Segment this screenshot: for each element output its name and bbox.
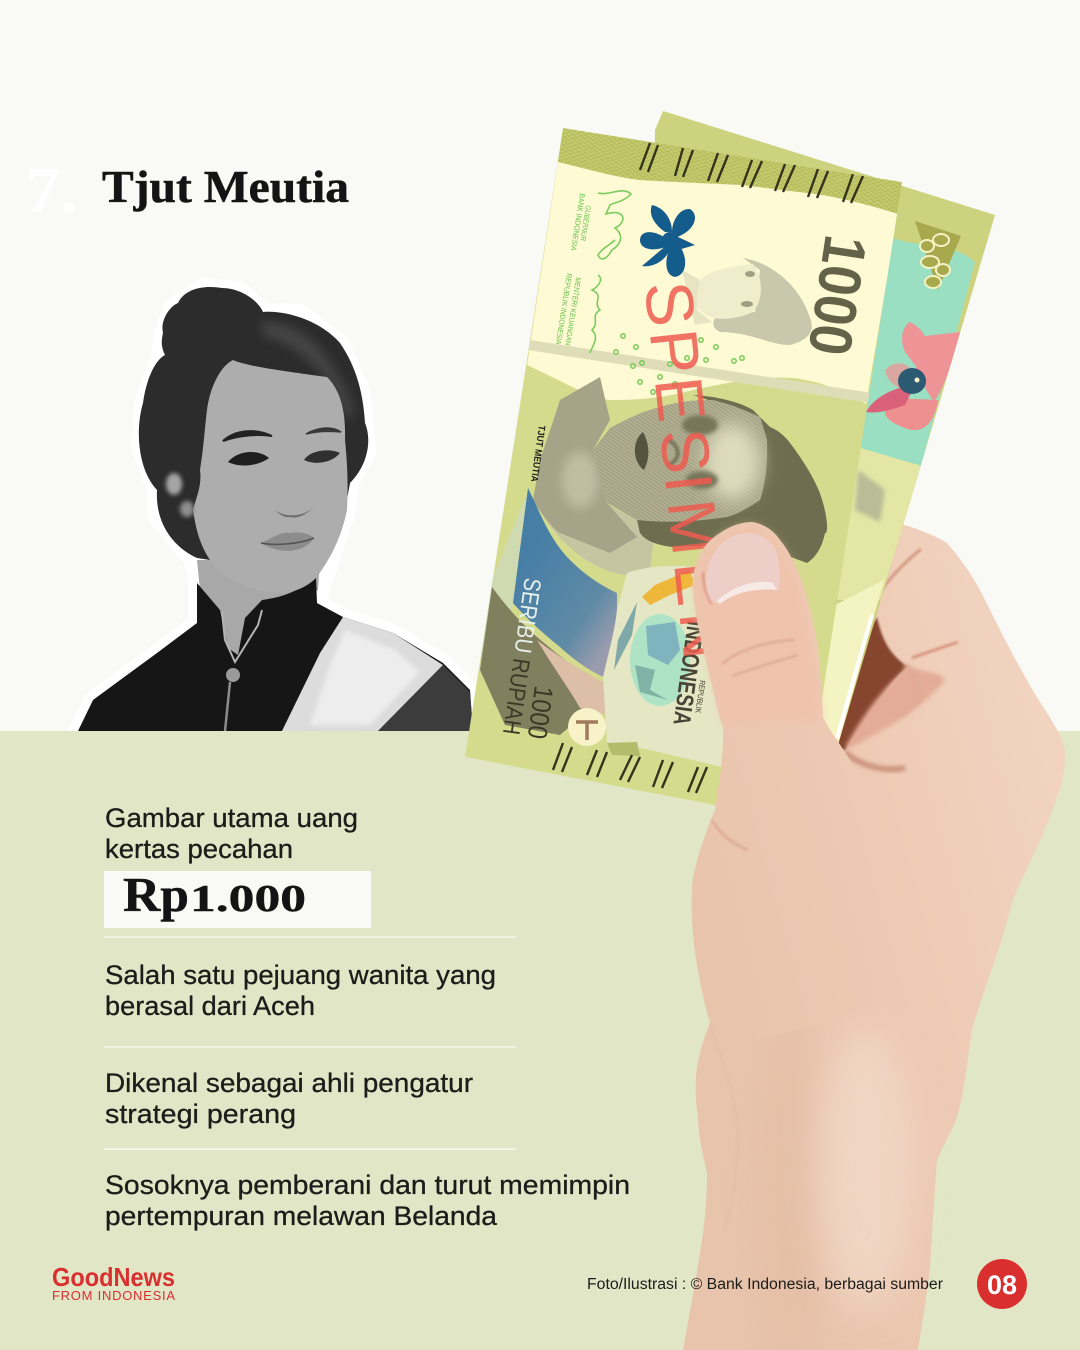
- dark olive wave: [480, 587, 600, 735]
- petal four: [642, 244, 670, 266]
- orange arc: [642, 570, 695, 605]
- bottom tick marks: [553, 743, 707, 793]
- left security strip: [480, 490, 528, 668]
- corner triangle: [915, 221, 961, 290]
- hand silhouette: [683, 523, 1065, 1350]
- signature marks: [590, 191, 631, 353]
- green coast patch: [607, 742, 640, 756]
- back note fields: [815, 235, 975, 745]
- line: Salah satu pejuang wanita yang: [105, 960, 496, 990]
- value words: SERIBU RUPIAH: [497, 576, 546, 736]
- collar edge: [222, 610, 262, 662]
- governor caption: BANK INDONESIA: [569, 193, 587, 251]
- text block 4: [105, 1170, 630, 1231]
- line: Dikenal sebagai ahli pengatur: [105, 1068, 473, 1098]
- ticks 5: [688, 767, 707, 793]
- mouth: [635, 432, 648, 470]
- title: Tjut Meutia: [102, 161, 349, 212]
- banknote front: [465, 128, 902, 822]
- minister title: REPUBLIK INDONESIA: [554, 273, 574, 345]
- ear highlight: [166, 473, 182, 495]
- main engraved portrait: [533, 377, 827, 575]
- value currency: Rp: [123, 867, 189, 922]
- sleeve: [378, 665, 473, 731]
- ticks 1: [553, 743, 572, 772]
- flower c: [921, 256, 939, 268]
- petal six: [676, 236, 695, 250]
- nose: [668, 440, 678, 465]
- ticks 2: [587, 750, 607, 777]
- crease index upper: [880, 549, 921, 592]
- blue wave: [513, 488, 617, 677]
- flower e: [925, 276, 941, 288]
- value 1000 top: 1000: [795, 231, 879, 360]
- nail fold: [703, 572, 712, 604]
- security thread strip: [528, 340, 872, 403]
- finger shading: [900, 665, 920, 715]
- dot: [673, 382, 677, 386]
- flower d: [936, 264, 950, 276]
- line: pertempuran melawan Belanda: [105, 1201, 498, 1231]
- petal five: [666, 244, 685, 277]
- seal: [568, 708, 606, 746]
- petal right: [915, 332, 960, 402]
- line: strategi perang: [105, 1099, 296, 1129]
- dot: [704, 358, 708, 362]
- wrist crease: [712, 820, 748, 850]
- sash highlight: [310, 630, 420, 725]
- lips: [261, 532, 314, 551]
- minister caption: MENTERI KEUANGAN: [563, 277, 583, 346]
- flower b: [920, 240, 934, 252]
- dot: [638, 380, 642, 384]
- cream lower strip: [822, 580, 884, 742]
- banknote back: [650, 111, 995, 745]
- pale lower field: [837, 448, 921, 600]
- photo credit: Foto/Ilustrasi : © Bank Indonesia, berbagai sumber: [587, 1276, 943, 1293]
- republik small caption: REPUBLIK: [693, 680, 707, 714]
- dot: [699, 338, 703, 342]
- line: kertas pecahan: [105, 834, 293, 864]
- ticks 1: [640, 143, 658, 172]
- text block 3: [105, 1068, 473, 1129]
- ear lobe: [180, 501, 194, 517]
- map field: [603, 566, 740, 770]
- thumbnail: [705, 533, 780, 603]
- teal wash: [850, 235, 975, 470]
- map island: [646, 622, 680, 665]
- signature governor: [598, 191, 631, 259]
- watermark face: [697, 264, 761, 319]
- value 1000 bottom: 1000: [522, 684, 559, 741]
- ticks 6: [808, 169, 828, 198]
- dot: [634, 345, 638, 349]
- watermark eye b: [741, 301, 753, 307]
- dot: [740, 356, 744, 360]
- lower green panel: [0, 731, 1080, 1350]
- corner flower: [920, 234, 950, 288]
- petal left pale: [885, 363, 910, 388]
- crease index lower: [912, 642, 958, 658]
- deep shadow between fingers and note: [826, 617, 908, 750]
- hair highlight: [262, 322, 352, 419]
- value amount: 1.000: [190, 878, 306, 920]
- page number badge: [977, 1259, 1027, 1309]
- eyebrow right: [306, 428, 341, 434]
- face: [193, 360, 348, 593]
- petal upper: [902, 322, 925, 367]
- portrait of Tjut Meutia: [70, 287, 473, 745]
- dot: [685, 356, 689, 360]
- knuckle crease: [722, 640, 798, 676]
- petal bottom: [885, 398, 938, 430]
- logo subline: FROM INDONESIA: [52, 1288, 175, 1303]
- face: [593, 400, 767, 522]
- line: Gambar utama uang: [105, 803, 358, 833]
- hand: palm, fingers and forearm: [683, 523, 1065, 1350]
- watermark eye a: [745, 271, 755, 277]
- face texture: [593, 400, 767, 522]
- thumbnail lunula: [717, 582, 777, 604]
- eye right: [304, 450, 340, 463]
- dot: [668, 362, 672, 366]
- petal one: [651, 205, 672, 232]
- veil: [533, 377, 637, 553]
- blue flower logo: [640, 205, 695, 277]
- nose: [275, 508, 313, 518]
- petal two: [672, 209, 695, 238]
- mouth line: [261, 538, 314, 544]
- ticks 3: [620, 755, 640, 782]
- governor title: GUBERNUR: [578, 205, 593, 242]
- specimen overprint: SPESIMEN: [630, 278, 744, 663]
- back note body: [650, 111, 995, 745]
- note name caption: TJUT MEUTIA: [528, 425, 547, 483]
- eye left: [228, 452, 269, 465]
- shoulder tone: [533, 495, 655, 575]
- dot: [714, 345, 718, 349]
- green dots: [614, 334, 744, 394]
- cream upper field: [527, 162, 898, 404]
- map teal sea: [630, 614, 690, 706]
- button: [226, 668, 240, 682]
- flower center: [898, 368, 926, 394]
- crease palm: [845, 752, 905, 769]
- cheek highlight: [704, 424, 760, 500]
- note body lime: [465, 128, 902, 822]
- section number: 7.: [25, 154, 78, 227]
- ticks 4: [742, 160, 762, 188]
- western island: [614, 602, 637, 670]
- logo wordmark: GoodNews: [52, 1262, 175, 1292]
- dot: [651, 390, 655, 394]
- second eye: [686, 471, 718, 489]
- watermark portrait: [682, 258, 812, 345]
- dot: [658, 375, 662, 379]
- thumb pink tone: [696, 526, 820, 725]
- watermark neck shade: [682, 270, 712, 325]
- flower a: [933, 234, 949, 246]
- lower arm shadow band: [760, 1000, 820, 1350]
- white sash: [282, 617, 443, 731]
- seal mark: [576, 722, 598, 740]
- petal lower left: [866, 388, 910, 412]
- white paper edge: [837, 615, 872, 738]
- ticks 4: [653, 760, 673, 788]
- ticks 3: [708, 153, 728, 182]
- band texture: [558, 128, 902, 214]
- dot: [621, 334, 625, 338]
- dot: [631, 364, 635, 368]
- flower on back note: [866, 322, 960, 430]
- thumb and palm: [692, 522, 900, 1040]
- country name: INDONESIA: [667, 619, 709, 727]
- badge number: 08: [987, 1270, 1017, 1300]
- wrist fold: [710, 1023, 738, 1233]
- text block 1: [105, 803, 358, 864]
- security band top: [558, 128, 902, 214]
- placket: [225, 682, 230, 731]
- value highlight: [104, 867, 371, 928]
- signature minister: [590, 275, 601, 353]
- ticks 2: [675, 148, 693, 177]
- dot: [640, 361, 644, 365]
- hair: [637, 395, 827, 563]
- watermark hair: [713, 258, 812, 345]
- lower arm highlight: [817, 1030, 913, 1310]
- black jacket: [78, 577, 473, 731]
- badge circle: [977, 1259, 1027, 1309]
- pink flourish: [537, 640, 607, 715]
- neck: [197, 560, 320, 660]
- forehead and eye shade: [682, 415, 718, 435]
- second finger tone: [845, 667, 945, 748]
- ticks 7: [843, 174, 863, 203]
- text block 2: [105, 960, 496, 1021]
- island lower: [635, 665, 668, 700]
- eyebrow left: [223, 431, 272, 441]
- veil fold light: [562, 452, 598, 508]
- pistil: [914, 378, 920, 382]
- grey motif: [855, 470, 885, 522]
- petal three: [640, 232, 668, 249]
- hair: [139, 287, 368, 560]
- hand: thumb over banknote: [692, 522, 900, 1040]
- top tick marks: [640, 143, 863, 203]
- value box: [104, 871, 371, 928]
- line: Sosoknya pemberani dan turut memimpin: [105, 1170, 630, 1200]
- portrait sticker outline: [70, 287, 473, 745]
- flower core: [662, 232, 678, 248]
- dot: [732, 359, 736, 363]
- logo: [52, 1262, 175, 1303]
- knuckle highlight: [730, 887, 810, 943]
- ticks 5: [775, 164, 795, 192]
- dot: [614, 350, 618, 354]
- line: berasal dari Aceh: [105, 991, 315, 1021]
